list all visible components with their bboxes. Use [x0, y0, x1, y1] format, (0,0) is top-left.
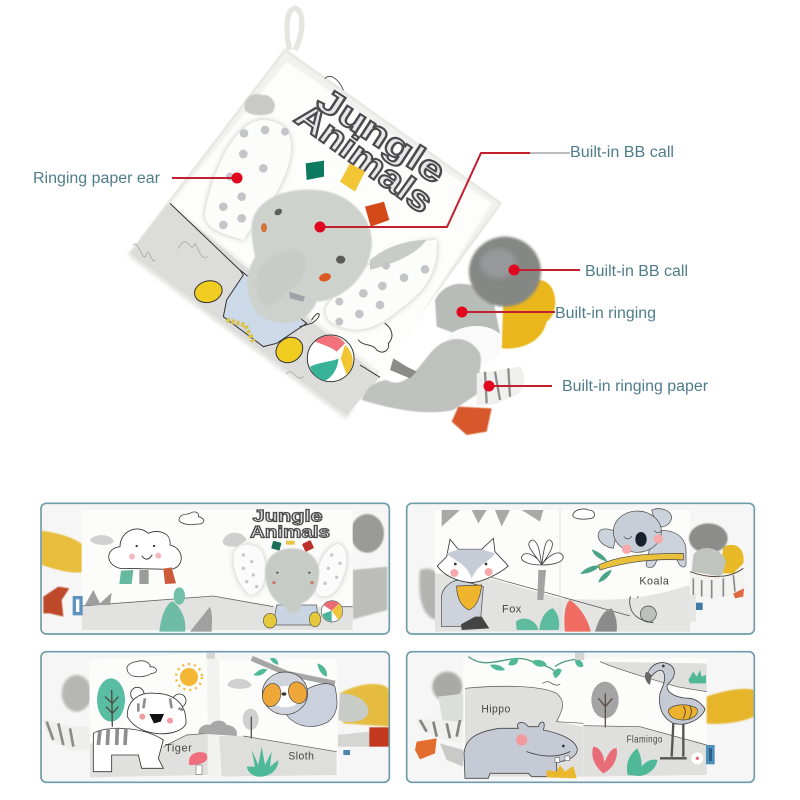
label: built-in BB call top: Built-in BB call — [570, 144, 674, 161]
back of toy: plush head — [435, 237, 555, 363]
grey bush — [198, 721, 237, 736]
grey cloud — [90, 535, 113, 545]
callout: plush head — [508, 264, 580, 276]
fox label: Fox — [502, 603, 522, 615]
spine tag — [390, 358, 417, 378]
callout: head — [314, 153, 570, 232]
snail — [630, 596, 656, 623]
hippo — [464, 722, 577, 778]
label: ringing paper ear: Ringing paper ear — [33, 170, 160, 187]
book cover — [128, 50, 501, 418]
plush at right — [337, 684, 389, 747]
callout: sock — [484, 380, 552, 392]
panel: fox and koala spread — [407, 503, 754, 634]
tiger label: Tiger — [165, 743, 192, 755]
callout: body — [456, 306, 555, 318]
label: built-in BB call: Built-in BB call — [585, 263, 688, 280]
ground leaves — [516, 600, 617, 632]
back of toy: grey leg — [362, 339, 481, 412]
outline cloud — [573, 509, 595, 519]
title text — [250, 508, 330, 538]
plush at right — [351, 514, 387, 619]
callout lines and dots — [172, 153, 580, 392]
plants — [85, 587, 212, 632]
vine — [468, 657, 583, 678]
left page — [90, 680, 94, 744]
plush at right — [689, 523, 745, 598]
small wavy lines — [543, 679, 652, 714]
green tree — [97, 678, 125, 727]
grey cloud — [244, 94, 275, 115]
mushroom — [189, 752, 207, 774]
panel: hippo and flamingo spread — [407, 652, 754, 782]
grey cloud behind ear — [223, 533, 247, 547]
smiling cloud — [109, 529, 181, 584]
plush at left — [419, 569, 437, 620]
page spread — [82, 521, 353, 618]
branch — [580, 549, 683, 583]
title: Jungle Animals: Animals — [288, 96, 440, 221]
elephant head — [247, 190, 372, 323]
plush at left — [42, 675, 92, 750]
orange foot — [43, 587, 69, 617]
right page — [336, 734, 338, 747]
sloth label: Sloth — [288, 750, 314, 762]
coloured ribbon tags — [306, 161, 389, 227]
plush at left — [415, 672, 465, 767]
spine shade — [575, 652, 584, 660]
teal shrub — [688, 670, 706, 683]
striped sock — [477, 367, 524, 405]
blue tag — [73, 596, 83, 615]
grey clouds and tree — [227, 679, 259, 738]
elephant — [234, 540, 346, 628]
palm plant — [521, 540, 563, 600]
koala label: Koala — [639, 576, 670, 588]
beach ball — [307, 335, 354, 382]
outline cloud — [127, 661, 156, 677]
koala — [598, 509, 686, 568]
label: built-in ringing paper: Built-in ringing paper — [562, 378, 708, 395]
right page — [583, 658, 707, 776]
fox — [437, 538, 508, 630]
title: Jungle Animals: Jungle — [310, 80, 452, 192]
sun — [176, 664, 202, 690]
grey tree — [591, 682, 619, 727]
right ear with dots — [326, 240, 437, 329]
page spread — [435, 568, 438, 574]
ball — [321, 601, 343, 622]
left page — [463, 657, 583, 777]
title text: Animals — [250, 522, 330, 541]
ground leaf — [247, 747, 278, 777]
orange foot tag — [452, 407, 492, 435]
label: built-in ringing: Built-in ringing — [555, 305, 656, 322]
blue tag — [706, 745, 715, 764]
ground plants — [592, 747, 703, 776]
tiger — [93, 687, 186, 772]
flamingo — [645, 663, 705, 758]
yellow wing tag — [707, 689, 754, 724]
spine — [208, 734, 220, 775]
left ear with dots — [205, 120, 291, 240]
small outline cloud — [358, 323, 392, 352]
flamingo label: Flamingo — [627, 735, 663, 746]
hippo label: Hippo — [481, 704, 511, 716]
panel: cover spread — [41, 503, 389, 634]
title text: Jungle — [253, 507, 323, 526]
yellow plant — [547, 765, 577, 778]
panel: tiger and sloth spread — [41, 652, 389, 782]
sloth — [252, 658, 337, 726]
hanging leaves — [442, 510, 543, 527]
elephant body — [223, 270, 307, 347]
product: elephant cloth book — [128, 8, 555, 435]
callout: ear — [172, 172, 242, 184]
hanging loop — [287, 8, 302, 50]
elephant feet — [192, 278, 319, 368]
yellow wing tag — [42, 531, 85, 573]
title: Jungle Animals — [288, 76, 452, 221]
blue tag — [343, 750, 350, 755]
blue tag — [696, 603, 703, 610]
outline cloud — [179, 512, 204, 525]
